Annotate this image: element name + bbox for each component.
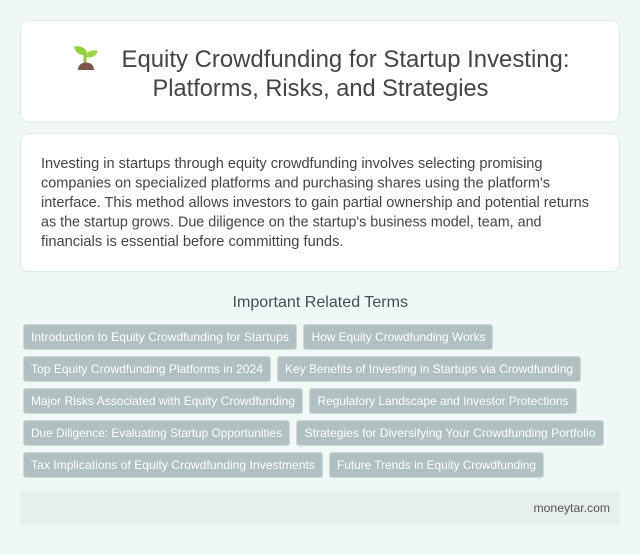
tag: major risks bbox=[24, 388, 302, 414]
tag: regulatory landscape: Regulatory Landscape and Investor Protections bbox=[318, 394, 568, 408]
text block: description: financials is essential before committing funds. bbox=[41, 234, 344, 250]
tag: due diligence bbox=[24, 420, 290, 446]
footer bbox=[20, 491, 620, 525]
icon: seedling bbox=[74, 46, 98, 70]
tag: tax implications: Tax Implications of Equity Crowdfunding Investments bbox=[31, 458, 315, 472]
tag: key benefits: Key Benefits of Investing in Startups via Crowdfunding bbox=[285, 362, 573, 376]
footer: moneytar.com bbox=[534, 501, 610, 515]
text block: description: interface. This method allows investors to gain partial ownership and potential returns bbox=[41, 195, 589, 211]
title bbox=[122, 46, 570, 102]
tag: top platforms: Top Equity Crowdfunding Platforms in 2024 bbox=[31, 362, 263, 376]
tag: due diligence: Due Diligence: Evaluating Startup Opportunities bbox=[31, 426, 282, 440]
tag: introduction: Introduction to Equity Crowdfunding for Startups bbox=[31, 330, 289, 344]
panel: title card bbox=[20, 20, 620, 122]
tag: how it works bbox=[304, 324, 492, 350]
tag: major risks: Major Risks Associated with Equity Crowdfunding bbox=[31, 394, 295, 408]
text block: description: companies on specialized platforms and purchasing shares using the platform's bbox=[41, 176, 550, 192]
title: Platforms, Risks, and Strategies bbox=[152, 75, 488, 102]
tag: regulatory landscape bbox=[310, 388, 576, 414]
tag: tax implications bbox=[24, 452, 322, 478]
tag: introduction bbox=[24, 324, 296, 350]
title: Equity Crowdfunding for Startup Investing: bbox=[122, 46, 570, 73]
text block: description bbox=[41, 156, 589, 250]
tag: how it works: How Equity Crowdfunding Works bbox=[312, 330, 486, 344]
tag: top platforms bbox=[24, 356, 270, 382]
tag: future trends: Future Trends in Equity Crowdfunding bbox=[337, 458, 536, 472]
tag list: related terms bbox=[24, 324, 604, 478]
text block: description: Investing in startups through equity crowdfunding involves selecting promising bbox=[41, 156, 542, 172]
tag: future trends bbox=[330, 452, 544, 478]
panel: intro description bbox=[20, 134, 620, 272]
tag: diversifying strategies: Strategies for Diversifying Your Crowdfunding Portfolio bbox=[304, 426, 596, 440]
tag: key benefits bbox=[278, 356, 580, 382]
tag: diversifying strategies bbox=[296, 420, 604, 446]
text block: description: as the startup grows. Due diligence on the startup's business model, team, and bbox=[41, 214, 542, 230]
heading: important related terms: Important Related Terms bbox=[232, 294, 408, 311]
